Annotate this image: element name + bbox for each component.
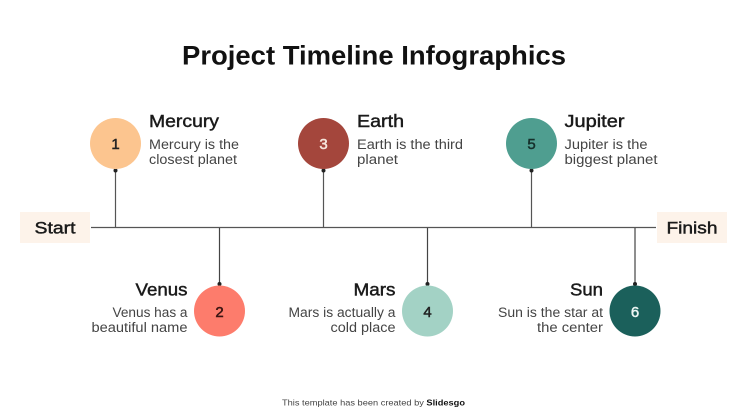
- milestone 4: Mars: [288, 228, 453, 336]
- milestone 4: Mars: cold place: [330, 320, 396, 335]
- timeline axis: [91, 226, 656, 228]
- milestone 6: Sun: Sun is the star at: [498, 305, 603, 320]
- milestone 1: Mercury: [90, 111, 239, 227]
- milestone 4: Mars: 4: [423, 304, 432, 321]
- finish label: Finish: [666, 218, 718, 238]
- milestone 2: Venus: 2: [215, 304, 224, 321]
- milestone 2: Venus: [92, 228, 245, 336]
- milestone 3: Earth: Earth: [357, 111, 404, 131]
- milestone 5: Jupiter: biggest planet: [564, 152, 658, 167]
- milestone 2: Venus: Venus has a: [112, 305, 188, 320]
- milestone 5: Jupiter: Jupiter: [564, 111, 625, 131]
- milestone 1: Mercury: Mercury: [149, 111, 219, 131]
- milestone 4: Mars: Mars is actually a: [288, 305, 396, 320]
- milestone 3: Earth: [298, 111, 463, 227]
- start label: [20, 212, 90, 243]
- title: Project Timeline Infographics: [182, 40, 566, 70]
- milestone 6: Sun: the center: [537, 320, 604, 335]
- milestone 3: Earth: 3: [319, 136, 328, 153]
- milestone 3: Earth: Earth is the third: [357, 137, 463, 152]
- milestone 1: Mercury: 1: [111, 136, 120, 153]
- milestone 3: Earth: planet: [357, 152, 398, 167]
- milestone 1: Mercury: Mercury is the: [149, 137, 239, 152]
- milestone 5: Jupiter: 5: [527, 136, 536, 153]
- milestone 2: Venus: Venus: [136, 280, 188, 300]
- start label: Start: [34, 218, 76, 238]
- milestone 2: Venus: beautiful name: [92, 320, 188, 335]
- milestone 1: Mercury: closest planet: [149, 152, 237, 167]
- milestone 6: Sun: Sun: [570, 280, 603, 300]
- finish label: [657, 212, 727, 243]
- milestone 5: Jupiter: [506, 111, 658, 227]
- milestone 5: Jupiter: Jupiter is the: [564, 137, 648, 152]
- milestone 4: Mars: Mars: [354, 280, 396, 300]
- footer credit: This template has been created by Slidesgo: [282, 398, 465, 408]
- milestone 6: Sun: [498, 228, 660, 336]
- milestone 6: Sun: 6: [631, 304, 639, 321]
